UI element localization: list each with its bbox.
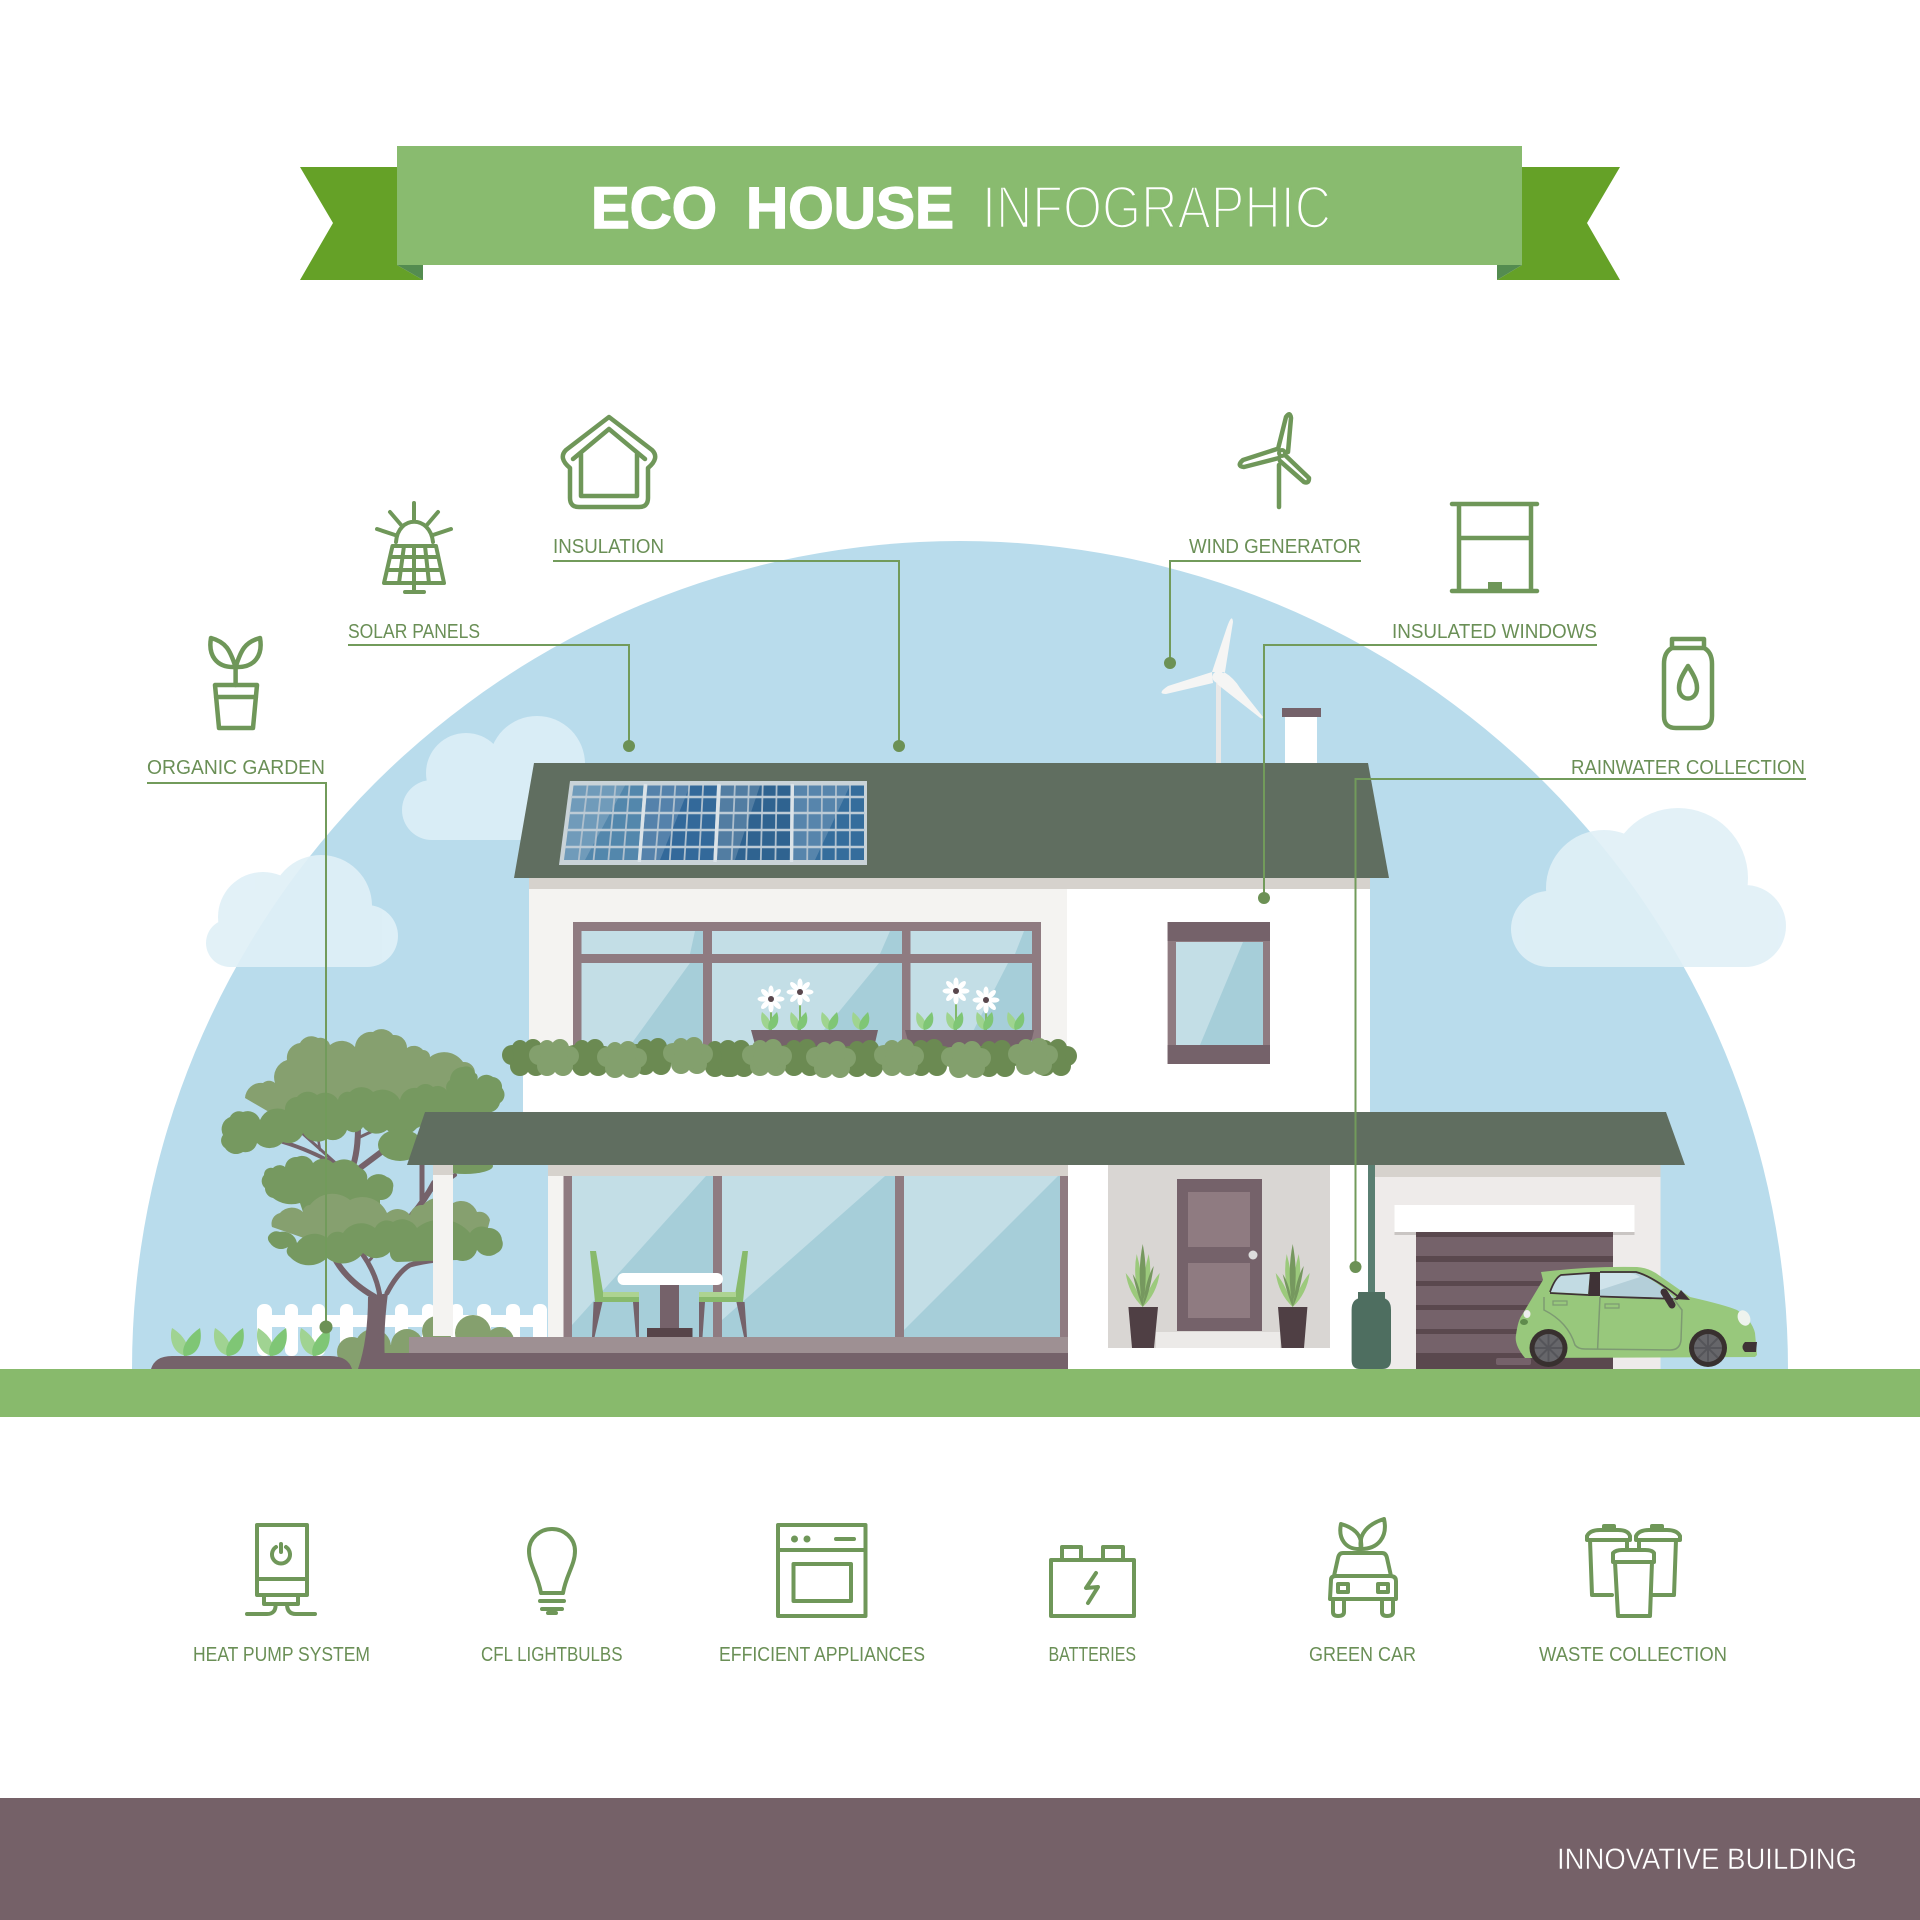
tree trunk [358,1293,388,1369]
small upper window [1168,922,1270,1064]
footer bar [0,1798,1920,1920]
house [383,763,1685,1369]
banner main [397,146,1522,265]
table and chairs [590,1251,748,1337]
item: batteries: BATTERIES [1048,1644,1136,1666]
plant left [1126,1244,1160,1348]
drain pipe [1368,1165,1375,1292]
icon: solar panel [377,503,451,592]
wind turbine [1161,618,1263,763]
title banner [300,146,1620,280]
callout: insulation: INSULATION [553,536,664,558]
callout: wind generator [1164,414,1361,669]
item: green car: GREEN CAR [1309,1644,1416,1666]
item: cfl lightbulbs [481,1529,622,1666]
icon: car with leaves [1330,1519,1396,1616]
callout: organic garden [147,638,332,1334]
item: efficient appliances [719,1525,925,1666]
title text [591,174,1331,241]
icon: heat pump [247,1525,315,1614]
item: heat pump system [193,1525,370,1666]
callout: rainwater collection [1350,639,1806,1273]
back shrubs [337,1315,514,1369]
solar panels [559,781,867,865]
icon: window [1452,504,1537,591]
right canopy tufts [378,1129,493,1174]
item: waste collection [1539,1526,1727,1666]
cloud left lower [206,855,398,967]
car windows [1550,1272,1690,1300]
ground [0,1369,1920,1417]
icon: plant pot [210,638,261,728]
front door [1177,1179,1262,1331]
car lights [1520,1308,1757,1352]
callout: solar panels: SOLAR PANELS [348,621,480,643]
green car [1516,1267,1757,1367]
flowers in window boxes [758,978,1024,1030]
ground floor walls [1068,1165,1375,1369]
car mirror [1664,1292,1672,1305]
rain barrel [1352,1292,1391,1369]
middle canopy [262,1156,393,1212]
icon: light bulb [529,1529,575,1613]
upper walls [523,889,1370,1113]
tree and garden [151,1029,547,1369]
plant right [1276,1244,1310,1348]
callout: solar panels [348,503,635,752]
tree branches [283,1128,455,1297]
fence [257,1304,547,1364]
entrance alcove [1108,1165,1330,1348]
title text: ECO [591,176,717,241]
footer text: INNOVATIVE BUILDING [1557,1843,1857,1876]
icon: bins [1587,1526,1680,1616]
item: batteries [1048,1547,1136,1666]
car handles [1553,1301,1619,1308]
callout: insulation [553,417,905,752]
main roof [514,763,1389,878]
front wheel [1689,1329,1727,1367]
porch base [383,1353,1068,1369]
rear wheel [1530,1329,1568,1367]
icon: battery [1051,1547,1134,1616]
item: heat pump system: HEAT PUMP SYSTEM [193,1644,370,1666]
lower roof [407,1112,1685,1165]
car door lines [1544,1297,1682,1350]
icon: house [563,417,655,507]
upper large window [573,922,1041,1047]
banner folds [397,265,1522,280]
upper canopy light [245,1029,477,1130]
item: cfl lightbulbs: CFL LIGHTBULBS [481,1644,622,1666]
sprouts [171,1328,330,1356]
callout: wind generator: WIND GENERATOR [1189,536,1361,558]
garage [1375,1165,1660,1369]
chimney [1282,708,1321,763]
banner left tail [300,167,423,280]
callout: insulated windows: INSULATED WINDOWS [1392,621,1597,643]
banner right tail [1497,167,1620,280]
soil bed [151,1356,352,1369]
icon: oven [778,1525,866,1616]
callout: organic garden: ORGANIC GARDEN [147,757,325,779]
window boxes [751,1030,1034,1052]
cloud left top [402,716,585,840]
item: green car [1309,1519,1416,1666]
soffit upper [529,878,1370,889]
porch floor [409,1337,1068,1353]
item: efficient appliances: EFFICIENT APPLIANCES [719,1644,925,1666]
right chair [699,1251,748,1337]
title text: INFOGRAPHIC [982,174,1331,241]
icon: water bottle [1664,639,1712,728]
lower canopy [268,1194,503,1265]
sky dome [132,541,1788,1369]
callout: rainwater collection: RAINWATER COLLECTION [1571,757,1805,779]
table [618,1273,723,1337]
balcony hedge [502,1037,1077,1078]
icon: wind turbine [1240,414,1309,507]
porch pillar [433,1165,453,1336]
title text: HOUSE [746,176,954,241]
item: waste collection: WASTE COLLECTION [1539,1644,1727,1666]
cloud right [1511,808,1786,967]
upper canopy dark [221,1066,505,1154]
garage door [1416,1232,1613,1369]
living room glazing [548,1165,1068,1337]
callout: insulated windows [1258,504,1597,904]
left chair [590,1251,639,1337]
